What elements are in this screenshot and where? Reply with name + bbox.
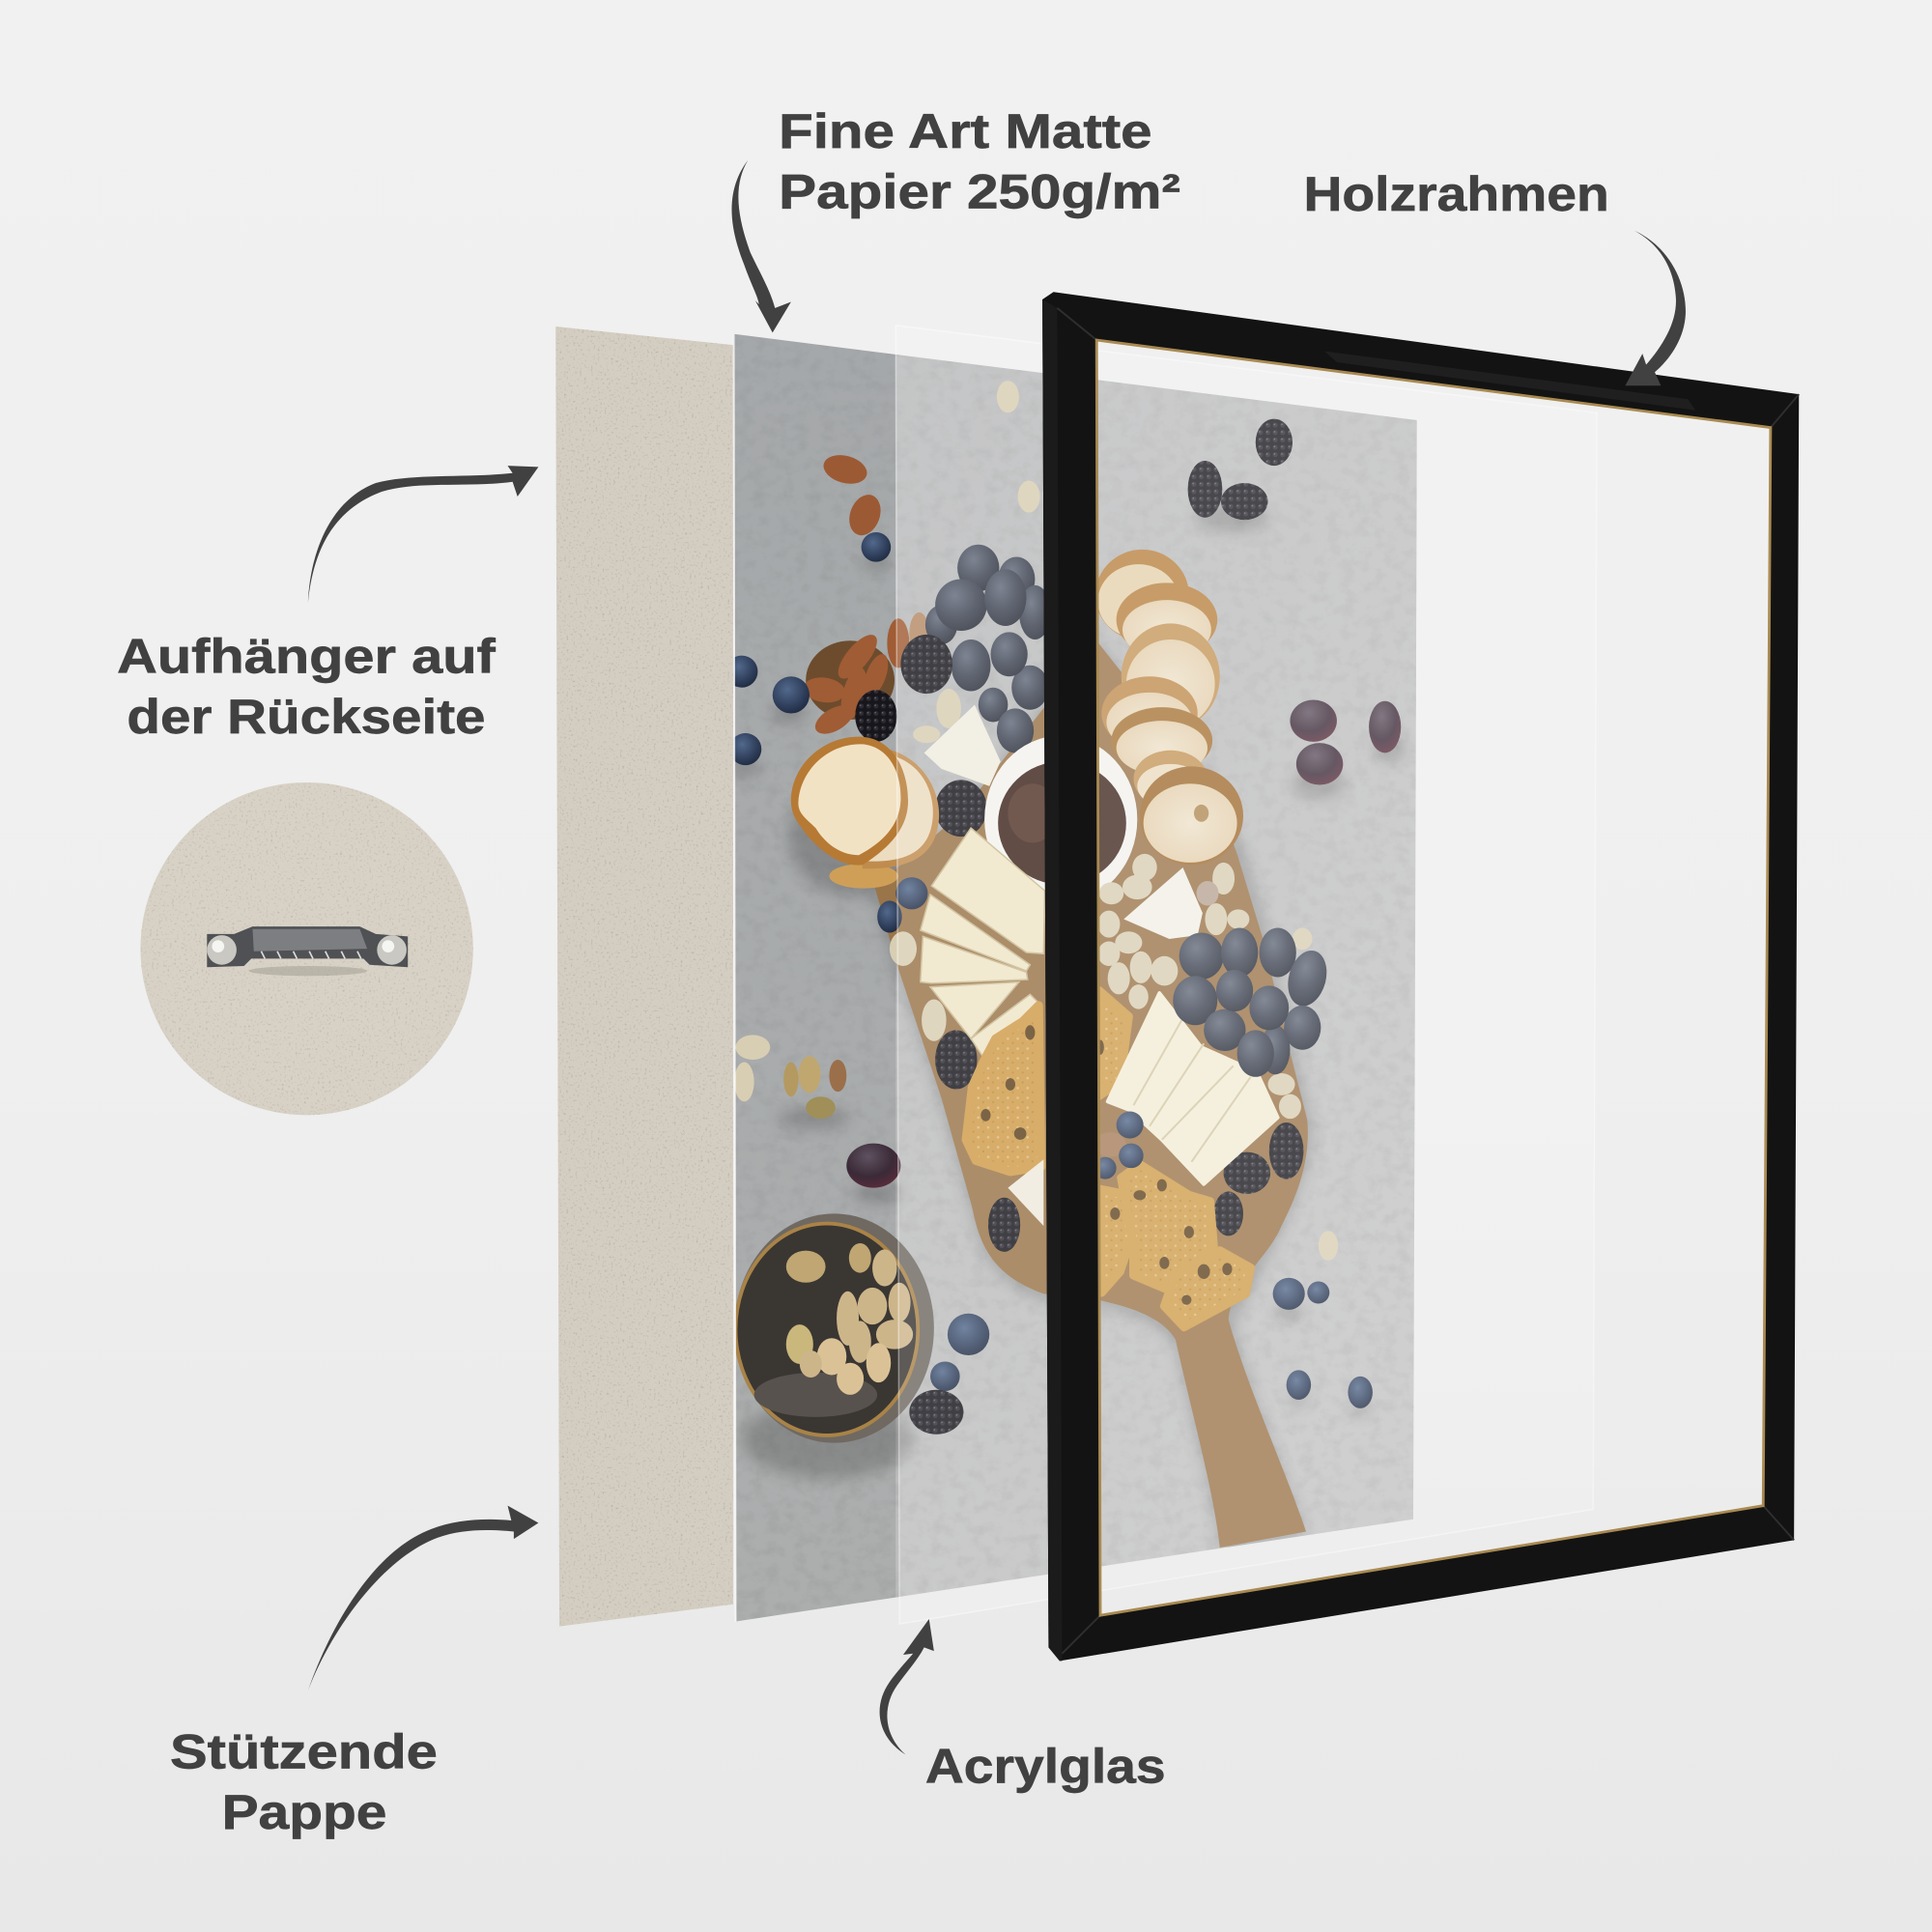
pistachio pile centre bbox=[1097, 854, 1312, 1119]
cheese fan bbox=[921, 828, 1045, 1061]
brie top bbox=[924, 705, 1001, 786]
heading: Acrylglas: Acrylglas bbox=[925, 1740, 1166, 1794]
paper left highlight edge bbox=[734, 334, 735, 1622]
toast slices right bbox=[1095, 550, 1243, 865]
brie lower bbox=[1008, 1159, 1043, 1226]
brie right bbox=[1123, 867, 1203, 939]
cutting board bbox=[875, 640, 1308, 1548]
heading: Aufhänger auf der Rückseite bbox=[117, 629, 496, 744]
panel: Holzrahmen frame bbox=[1042, 292, 1799, 1661]
panel: hanger detail circle bbox=[140, 782, 473, 1115]
icon: sawtooth hanger bbox=[207, 926, 408, 976]
pistachios scattered bbox=[734, 381, 1338, 1261]
arrow: Aufhänger bbox=[308, 466, 538, 603]
blackberries bbox=[855, 419, 1303, 1435]
grapes top cluster bbox=[925, 545, 1051, 753]
jam bowl bbox=[984, 735, 1137, 903]
panel: Acrylglas sheet bbox=[895, 326, 1597, 1624]
almonds top bbox=[823, 455, 881, 535]
heading: Aufhänger auf der Rückseite: Aufhänger auf bbox=[117, 629, 496, 683]
almonds under cheese bbox=[1100, 1132, 1126, 1157]
arrow: Acrylglas bbox=[880, 1619, 934, 1754]
grapes right bbox=[1173, 927, 1332, 1077]
arrow: Stützende Pappe bbox=[308, 1506, 538, 1690]
heading: Aufhänger auf der Rückseite: der Rückseite bbox=[127, 690, 486, 744]
infographic scene bbox=[118, 112, 1800, 1839]
heading: Fine Art Matte Papier 250g/m² bbox=[779, 104, 1180, 219]
loose red grapes bbox=[846, 699, 1401, 1188]
heading: Stützende Pappe: Stützende bbox=[170, 1724, 438, 1778]
heading: Fine Art Matte Papier 250g/m²: Papier 250g/m² bbox=[779, 165, 1180, 219]
pretzel crackers left bbox=[966, 991, 1128, 1172]
panel: Fine Art Matte Papier with photo bbox=[725, 321, 1430, 1633]
heading: Holzrahmen: Holzrahmen bbox=[1303, 167, 1609, 221]
almond pile on wooden dish bbox=[802, 612, 929, 740]
shadows under food bbox=[729, 502, 1406, 1550]
heading: Fine Art Matte Papier 250g/m²: Fine Art Matte bbox=[779, 104, 1152, 158]
arrow: Holzrahmen bbox=[1625, 231, 1686, 385]
blueberries left bbox=[725, 532, 989, 1391]
nut bowl bbox=[734, 1213, 934, 1443]
panel: stützende Pappe bbox=[549, 321, 739, 1633]
blueberries right bbox=[1094, 1112, 1373, 1408]
pretzel crackers bottom bbox=[1099, 1164, 1251, 1327]
frame glass tint bbox=[1096, 340, 1771, 1615]
bread left bbox=[791, 737, 939, 889]
cheese slices right bbox=[1108, 993, 1278, 1184]
heading: Stützende Pappe: Pappe bbox=[222, 1785, 387, 1839]
arrow: Fine Art Matte Papier bbox=[731, 160, 791, 332]
heading: Stützende Pappe bbox=[170, 1724, 438, 1839]
